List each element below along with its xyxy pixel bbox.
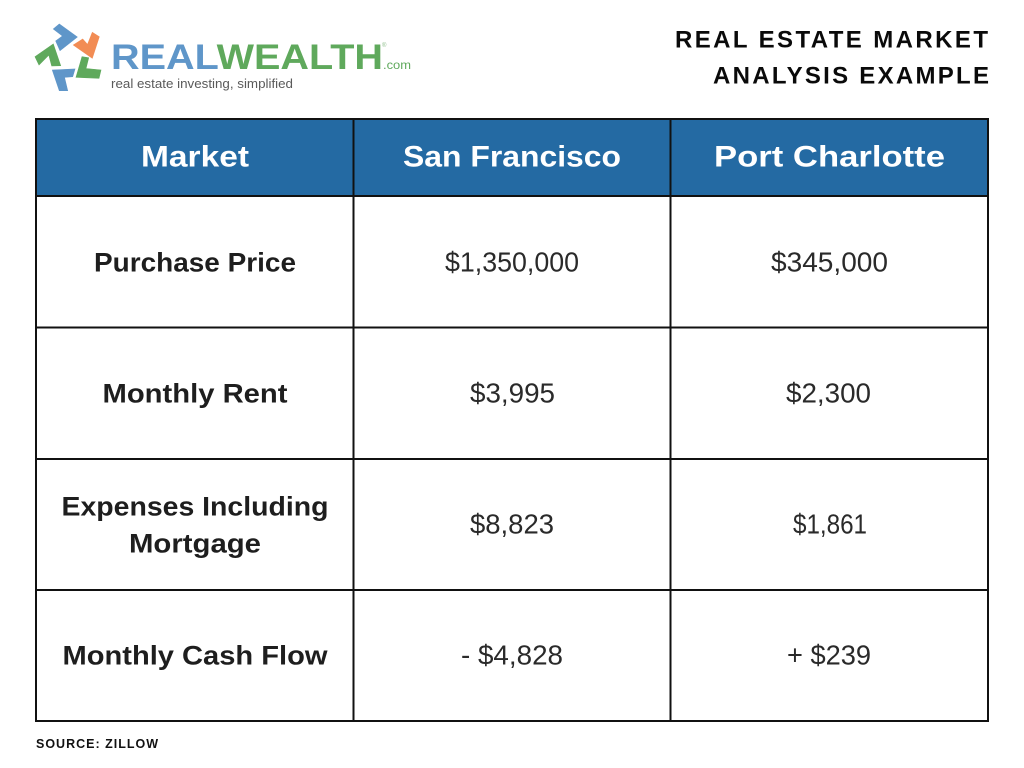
table header row	[36, 119, 988, 196]
logo wordmark: REAL WEALTH	[111, 38, 383, 77]
row: Monthly Rent: $3,995	[470, 378, 555, 408]
row: Expenses Including Mortgage: Mortgage	[129, 528, 261, 558]
row: Monthly Rent: $2,300	[786, 378, 871, 408]
row: Monthly Cash Flow: - $4,828	[461, 640, 563, 670]
row: Monthly Cash Flow	[62, 640, 871, 670]
row: Purchase Price: Purchase Price	[94, 248, 296, 278]
row: Monthly Cash Flow: + $239	[787, 640, 871, 670]
row: Purchase Price	[94, 246, 888, 278]
row: Monthly Rent	[102, 378, 871, 408]
icon: five arrow pinwheel	[35, 24, 101, 91]
row: Purchase Price: $1,350,000	[445, 246, 579, 278]
header: Market: Market	[141, 140, 249, 174]
row: Purchase Price: $345,000	[771, 246, 888, 278]
title	[675, 26, 989, 90]
header: Port Charlotte: Port Charlotte	[714, 140, 945, 174]
row: Monthly Cash Flow: Monthly Cash Flow	[62, 640, 328, 670]
row: Expenses Including Mortgage: Expenses Including	[62, 492, 328, 522]
row: Expenses Including Mortgage: $1,861	[793, 508, 867, 540]
logo: RealWealth	[35, 24, 411, 91]
title: ANALYSIS EXAMPLE	[713, 62, 989, 90]
logo domain suffix: .com	[383, 60, 411, 72]
comparison table	[36, 119, 988, 721]
row: Expenses Including Mortgage: $8,823	[470, 508, 554, 540]
row: Monthly Rent: Monthly Rent	[102, 378, 288, 408]
source note: SOURCE: ZILLOW	[36, 737, 158, 751]
logo registered mark: ®	[382, 42, 387, 49]
logo tagline: real estate investing, simplified	[111, 77, 293, 91]
title: REAL ESTATE MARKET	[675, 26, 988, 54]
row: Expenses Including Mortgage	[62, 492, 867, 558]
header: San Francisco: San Francisco	[403, 140, 621, 174]
